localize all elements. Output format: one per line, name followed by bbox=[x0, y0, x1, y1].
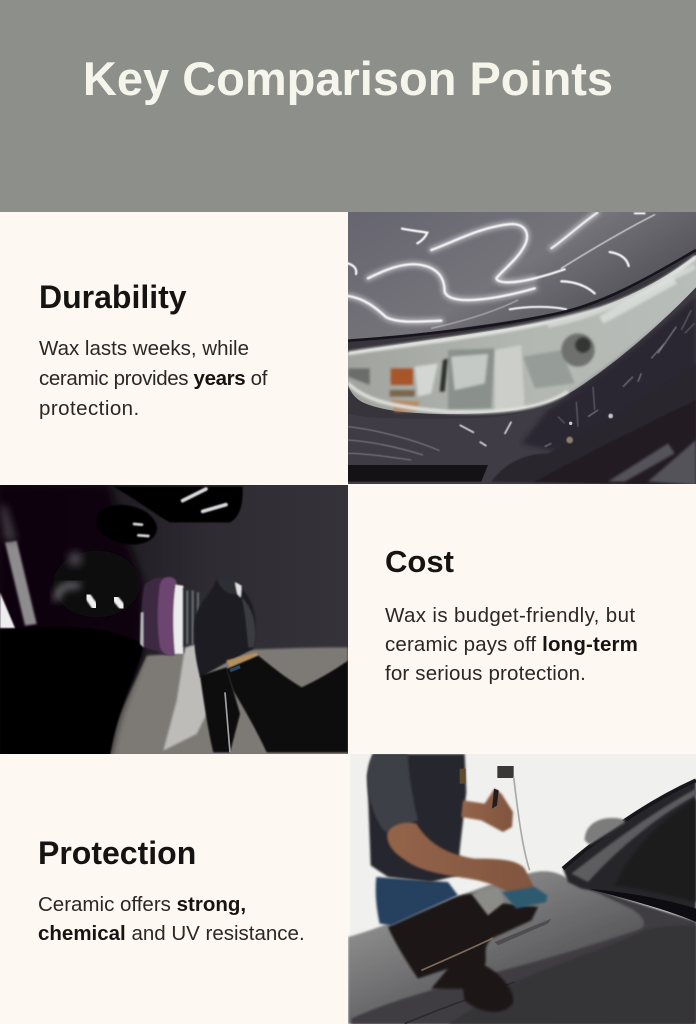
panel: durability text bbox=[0, 212, 348, 484]
shirt bbox=[367, 754, 466, 882]
buffer pad bbox=[140, 577, 207, 656]
bumper and dark reflections bbox=[348, 290, 696, 485]
photo: polished car headlight bbox=[348, 212, 696, 484]
gloved hand bbox=[194, 576, 258, 677]
mirror bbox=[585, 818, 625, 845]
arm to sponge bbox=[387, 823, 536, 897]
text: protection description: Ceramic offers strong, bbox=[38, 893, 246, 916]
text: cost description: Wax is budget-friendly, but bbox=[385, 604, 635, 627]
headlight bbox=[348, 255, 696, 414]
heading: protection: Protection bbox=[38, 835, 196, 871]
panel: protection text bbox=[0, 754, 348, 1024]
heading: cost: Cost bbox=[385, 544, 454, 579]
reflection bbox=[388, 894, 538, 1012]
windshield bbox=[563, 780, 696, 919]
wiper bbox=[588, 889, 696, 922]
car body shadow bbox=[0, 484, 143, 756]
cloth bbox=[163, 644, 208, 751]
photo: polishing car door with orbital buffer bbox=[0, 485, 348, 754]
hood shut line bbox=[348, 250, 696, 341]
hood and car body bbox=[348, 871, 696, 1024]
text: durability description: Wax lasts weeks, while bbox=[39, 337, 249, 360]
header banner bbox=[0, 0, 696, 212]
text: protection description: chemical and UV resistance. bbox=[38, 922, 305, 945]
text: cost description: for serious protection. bbox=[385, 662, 586, 685]
text: durability description: ceramic provides years of bbox=[39, 367, 267, 390]
floor bbox=[100, 647, 348, 756]
door glass strip bbox=[5, 541, 37, 626]
title: Key Comparison Points bbox=[83, 52, 613, 105]
heading: durability: Durability bbox=[39, 279, 187, 315]
mirror bbox=[113, 487, 243, 522]
hood bbox=[348, 212, 696, 341]
text: cost description bbox=[385, 604, 638, 685]
text: durability description bbox=[39, 337, 268, 420]
raised arm and bottle hand bbox=[461, 789, 513, 832]
text: protection description bbox=[38, 893, 305, 945]
jeans bbox=[376, 877, 458, 925]
reflection on door bbox=[53, 551, 140, 617]
panel: cost text bbox=[348, 484, 696, 754]
text: cost description: ceramic pays off long-term bbox=[385, 633, 638, 656]
sponge bbox=[502, 887, 547, 909]
photo: applying ceramic coating to car hood bbox=[348, 754, 696, 1024]
sleeve bbox=[227, 656, 348, 752]
text: durability description: protection. bbox=[39, 397, 140, 420]
